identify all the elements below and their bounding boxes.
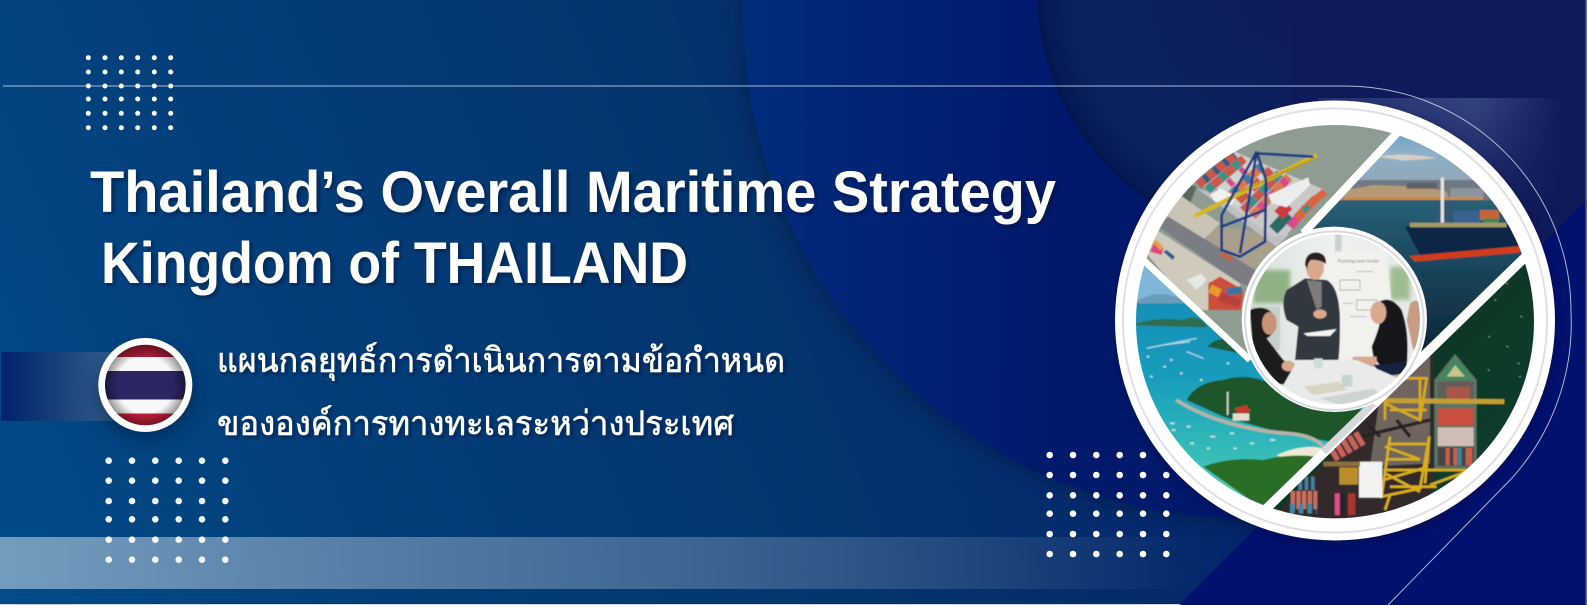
woman left xyxy=(1250,307,1296,386)
right edge line xyxy=(1586,0,1587,605)
Thai subtitle: ขององค์การทางทะเลระหว่างประเทศ xyxy=(217,405,734,443)
bottom edge line xyxy=(0,604,1180,605)
whiteboard xyxy=(1334,250,1392,318)
white ring xyxy=(1115,100,1555,540)
dots lower-right xyxy=(1046,452,1170,557)
title: Kingdom of THAILAND xyxy=(101,231,688,296)
flag band xyxy=(1,352,115,421)
icon: Thai flag badge xyxy=(96,338,196,440)
dark top-right shape xyxy=(1037,0,1586,245)
white dividers xyxy=(1143,132,1527,508)
photo sectors xyxy=(1123,120,1537,523)
photo collage circle xyxy=(1114,100,1556,545)
large navy circle xyxy=(736,0,1242,526)
photo: container port xyxy=(1144,125,1392,360)
diagonal navy corner xyxy=(1179,200,1587,605)
photo: beach xyxy=(1136,266,1364,506)
photo: cargo ship xyxy=(1312,136,1522,352)
dots top-left xyxy=(86,55,173,130)
man in suit xyxy=(1283,252,1340,360)
dots lower-left xyxy=(105,457,229,563)
Thai subtitle: แผนกลยุทธ์การดำเนินการตามข้อกำหนด xyxy=(217,342,785,381)
bottom translucent band xyxy=(0,537,1200,589)
centre photo: meeting xyxy=(1242,227,1427,412)
title: Thailand’s Overall Maritime Strategy xyxy=(90,160,1056,225)
Thai subtitle xyxy=(217,342,785,443)
circle shadow xyxy=(1114,240,1557,546)
photo: yellow cranes and ship xyxy=(1273,264,1534,518)
meeting table xyxy=(1283,358,1397,404)
translucent glow behind circle xyxy=(1318,98,1547,180)
whiteboard: Running new model xyxy=(1338,259,1379,264)
title xyxy=(90,160,1056,296)
woman right xyxy=(1352,299,1420,378)
